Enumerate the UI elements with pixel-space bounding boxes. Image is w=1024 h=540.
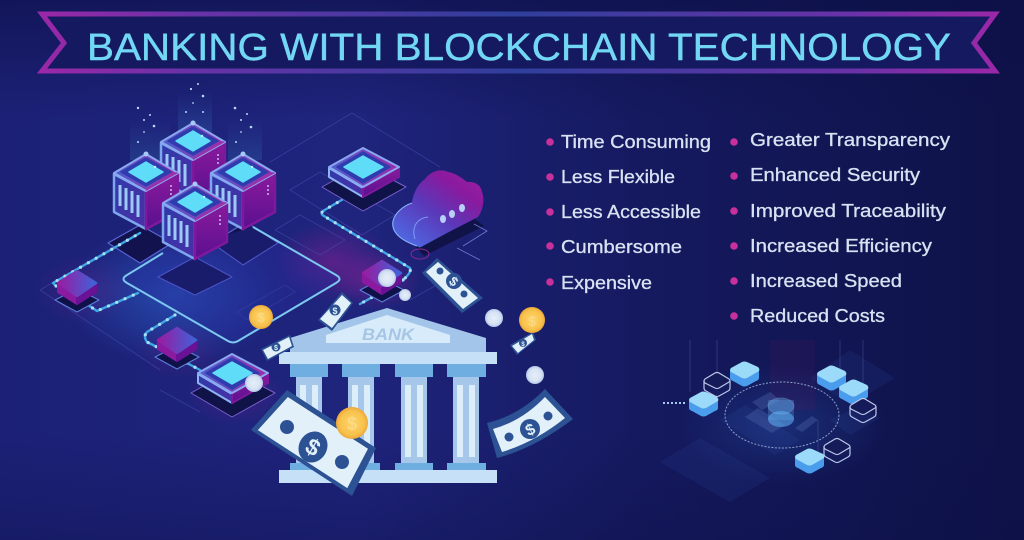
banknote: small near roof: $ bbox=[332, 306, 338, 316]
list: current banking drawbacks: Expensive bbox=[561, 273, 652, 293]
banknote: large right: $ bbox=[523, 421, 538, 440]
column 2 bbox=[342, 364, 380, 470]
title banner bbox=[42, 14, 995, 71]
particles bbox=[137, 83, 252, 143]
server: back bbox=[161, 120, 225, 198]
server: front bbox=[163, 182, 227, 259]
server: left bbox=[114, 152, 178, 229]
node: small right bbox=[360, 261, 404, 302]
list: current banking drawbacks: Less Flexible bbox=[561, 167, 675, 187]
node: small left bbox=[55, 271, 99, 312]
base bbox=[279, 470, 497, 483]
coin: gold right bbox=[519, 307, 545, 333]
banknote: large right bbox=[487, 389, 573, 458]
list: blockchain benefits: Improved Traceability bbox=[750, 201, 946, 221]
banknote: small right: $ bbox=[521, 342, 525, 348]
glow beams bbox=[130, 92, 262, 160]
node: small middle bbox=[155, 328, 199, 369]
ring interior tiles bbox=[745, 392, 818, 433]
coin: gold on bill bbox=[336, 407, 368, 439]
isometric network illustration bbox=[40, 83, 487, 417]
banknote: small left bbox=[261, 335, 294, 361]
ring bbox=[725, 382, 839, 448]
list: blockchain benefits bbox=[730, 130, 950, 326]
bank label: BANK bbox=[362, 325, 416, 344]
coin: gold left: $ bbox=[257, 310, 265, 325]
banknote: small left: $ bbox=[274, 345, 278, 352]
faint red glow bbox=[770, 340, 815, 410]
banknote: small near roof bbox=[318, 292, 353, 331]
list: current banking drawbacks: Less Accessible bbox=[561, 202, 701, 222]
icon: cloud bbox=[393, 170, 487, 260]
list: blockchain benefits: Greater Transparency bbox=[750, 130, 950, 150]
list: blockchain benefits: Enhanced Security bbox=[750, 165, 920, 185]
title text: BANKING WITH BLOCKCHAIN TECHNOLOGY bbox=[87, 27, 951, 69]
column 3 bbox=[395, 364, 433, 470]
server: right bbox=[211, 152, 275, 229]
faint data blocks bbox=[660, 350, 895, 502]
banknote: top right: $ bbox=[446, 273, 462, 290]
list: blockchain benefits: Increased Efficiency bbox=[750, 236, 932, 256]
list: current banking drawbacks bbox=[546, 132, 711, 293]
dotted connector lines bbox=[53, 198, 410, 370]
silver coins bbox=[245, 269, 544, 392]
faint circuit grid bbox=[40, 113, 440, 412]
node: bottom bbox=[191, 354, 275, 417]
list: blockchain benefits: Increased Speed bbox=[750, 271, 902, 291]
column 1 bbox=[290, 364, 328, 470]
banknote: small right bbox=[510, 332, 536, 355]
node: top right bbox=[322, 148, 406, 211]
coin: gold on bill: $ bbox=[347, 414, 357, 434]
coin: gold left bbox=[249, 305, 273, 329]
column 4 bbox=[447, 364, 486, 470]
rounded circuit diamond bbox=[124, 227, 340, 342]
list: current banking drawbacks: Cumbersome bbox=[561, 237, 682, 257]
cornice bbox=[279, 352, 497, 364]
blocks bbox=[730, 362, 759, 386]
coins bbox=[245, 269, 545, 439]
dotted lead-in bbox=[663, 402, 687, 404]
bank building bbox=[279, 308, 497, 483]
vertical lines bbox=[690, 340, 863, 452]
blockchain ring illustration bbox=[660, 340, 895, 502]
list: current banking drawbacks: Time Consuming bbox=[561, 132, 711, 152]
coin: gold right: $ bbox=[528, 313, 536, 329]
list: blockchain benefits: Reduced Costs bbox=[750, 306, 885, 326]
banknote: large left bbox=[251, 390, 376, 496]
dark platforms under servers bbox=[108, 222, 278, 295]
banknote: top right bbox=[422, 258, 483, 313]
banknote: large left: $ bbox=[301, 433, 325, 462]
pediment bbox=[290, 308, 486, 352]
centre cylinder bbox=[768, 398, 794, 427]
